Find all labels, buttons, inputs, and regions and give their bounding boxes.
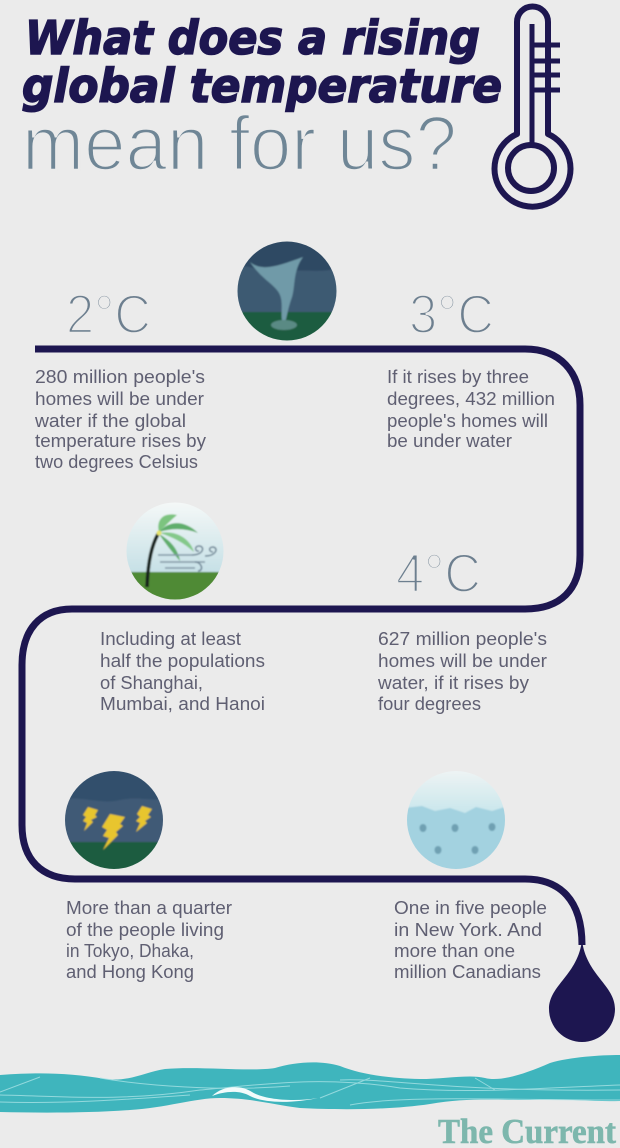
text: 4 degree impact bbox=[377, 629, 547, 714]
text: 4 degree impact: homes will be under bbox=[378, 651, 547, 671]
text: 4 degree impact: water, if it rises by bbox=[377, 673, 529, 693]
text: Asia cities: in Tokyo, Dhaka, bbox=[66, 941, 194, 961]
text: North America bbox=[394, 898, 547, 982]
icon: lightning storm bbox=[65, 771, 163, 869]
icon: tornado bbox=[238, 242, 336, 340]
text: 2 degree impact bbox=[34, 367, 206, 472]
winding path line bbox=[22, 349, 582, 945]
text: 2 degree impact: homes will be under bbox=[35, 389, 204, 409]
text: cities: of Shanghai, bbox=[100, 673, 203, 693]
text: 2 degree impact: 280 million people's bbox=[35, 367, 205, 387]
text: 4 degree impact: 627 million people's bbox=[378, 629, 547, 649]
text: cities bbox=[100, 629, 265, 714]
text: cities: half the populations bbox=[100, 651, 265, 671]
text: 2 degree impact: water if the global bbox=[34, 411, 186, 431]
title: mean for us? bbox=[22, 101, 457, 187]
title: What does a rising bbox=[25, 11, 480, 65]
text: cities: Mumbai, and Hanoi bbox=[100, 694, 265, 714]
text: Asia cities: of the people living bbox=[66, 920, 224, 940]
title: global temperature bbox=[22, 59, 502, 113]
text: North America: more than one bbox=[394, 941, 515, 961]
text: cities: Including at least bbox=[100, 629, 241, 649]
icon: thermometer bbox=[495, 6, 570, 207]
text: 3 degree impact: If it rises by three bbox=[387, 367, 529, 387]
text: 2 degree impact: temperature rises by bbox=[35, 431, 206, 451]
waves bbox=[0, 1055, 620, 1113]
text: 2 degree impact: two degrees Celsius bbox=[35, 452, 198, 472]
title bbox=[22, 11, 502, 187]
icon: water drop bbox=[549, 940, 615, 1042]
icon: palm tree in wind bbox=[125, 500, 225, 602]
icon: hail bbox=[404, 770, 508, 872]
text: Asia cities: More than a quarter bbox=[66, 898, 232, 918]
text: 3 degree impact bbox=[387, 367, 555, 451]
label: 4 degrees: 4°C bbox=[396, 542, 481, 604]
text: 3 degree impact: be under water bbox=[387, 431, 512, 451]
label: 2 degrees: 2°C bbox=[66, 283, 151, 345]
text: Asia cities bbox=[66, 898, 232, 982]
text: North America: million Canadians bbox=[394, 962, 541, 982]
text: North America: in New York. And bbox=[394, 920, 542, 940]
text: North America: One in five people bbox=[394, 898, 547, 918]
text: 3 degree impact: people's homes will bbox=[387, 411, 548, 431]
label: 3 degrees: 3°C bbox=[409, 283, 494, 345]
text: 4 degree impact: four degrees bbox=[378, 694, 481, 714]
text: 3 degree impact: degrees, 432 million bbox=[387, 389, 555, 409]
text: Asia cities: and Hong Kong bbox=[66, 962, 194, 982]
